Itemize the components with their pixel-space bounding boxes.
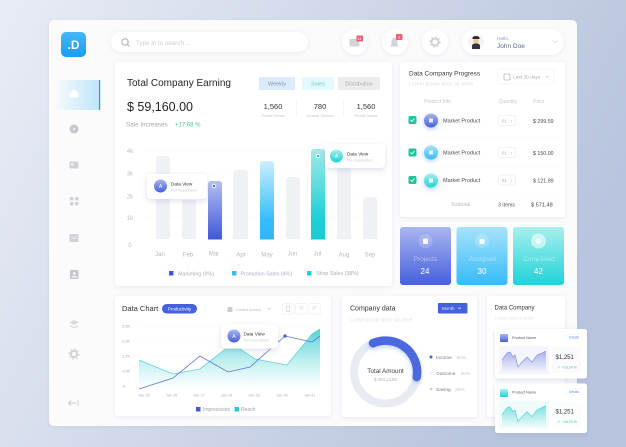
line chart	[122, 324, 320, 398]
badge: productivity	[162, 304, 197, 314]
icon button: bell	[382, 29, 408, 55]
icon button: bell: 3	[398, 34, 401, 40]
product card 1	[495, 329, 587, 378]
subtotal	[451, 202, 553, 208]
line chart: 1,7K	[122, 354, 131, 358]
row 2: Market Product	[443, 150, 481, 156]
bar chart: Apr	[236, 252, 246, 258]
row 1	[408, 114, 554, 128]
icon button: settings	[422, 29, 448, 55]
product card 2: $1,251	[556, 410, 575, 416]
stat card: assigned	[456, 227, 508, 285]
donut chart: $ 204,14.00	[374, 377, 397, 382]
product card 1: +16,24 %	[562, 366, 577, 370]
bar chart legend	[169, 271, 359, 278]
tooltip: March: Data View	[171, 182, 193, 186]
panel: data company progress	[400, 62, 565, 217]
table header	[424, 99, 545, 105]
sale increases: +17,68 %	[175, 122, 201, 128]
panel: data company: Lorem ipsum dolor	[494, 316, 535, 322]
row 1: $ 299.59	[533, 119, 554, 125]
bar chart: 0	[128, 243, 132, 249]
icon button: mail: 11	[358, 36, 363, 41]
user profile: John Doe	[497, 43, 525, 50]
row 1: ↕	[510, 118, 512, 124]
row 2: 01	[502, 150, 507, 156]
product card 2: Product Name	[512, 390, 536, 394]
date dropdown: Last 30 days	[513, 74, 541, 80]
summary stats: 1,560	[264, 102, 282, 111]
row 3: $ 121.89	[533, 178, 554, 184]
donut legend: Income	[436, 355, 452, 361]
user profile: Hello,	[497, 36, 509, 42]
logo	[61, 32, 86, 57]
icon: grid	[70, 197, 78, 206]
row 2	[408, 146, 554, 160]
tooltip: July: A	[335, 154, 339, 160]
stat card: assigned: 30	[478, 267, 487, 276]
stat card: completed	[513, 227, 564, 285]
tooltip: March	[147, 174, 207, 199]
line chart: Jan 30	[276, 394, 288, 398]
summary stats: 780	[314, 102, 326, 111]
product card 2: +16,24 %	[562, 420, 577, 424]
donut chart	[354, 340, 417, 404]
icon: clock	[70, 124, 78, 134]
user profile	[462, 29, 564, 55]
bar chart legend: Marketing (9%)	[178, 272, 214, 278]
panel: total company earning	[115, 62, 392, 286]
icon button: mail	[342, 29, 368, 55]
panel: data company	[487, 296, 565, 417]
summary stats	[261, 100, 378, 118]
bar chart: Jan	[155, 252, 165, 258]
bar chart: 4k	[127, 149, 134, 155]
panel: data chart	[115, 296, 331, 416]
stat card: completed: Completed	[523, 256, 555, 263]
row 2: $ 150.00	[533, 151, 554, 157]
line chart: 1,0K	[122, 368, 131, 374]
line chart: 2,5K	[122, 324, 131, 328]
product card 1: Details	[569, 336, 579, 340]
product card 1: $1,251	[556, 355, 575, 361]
panel: company data: Company data	[350, 306, 396, 312]
stat card: projects: 24	[421, 267, 430, 276]
row 3: Market Product	[443, 178, 481, 184]
heading: Total Company Earning	[127, 78, 231, 89]
summary stats: Profile Views	[261, 113, 285, 118]
icon: layers	[70, 320, 78, 328]
panel: company data	[342, 296, 477, 417]
tabs: Sales	[311, 82, 325, 88]
subtotal: $ 571.48	[531, 202, 553, 208]
row 3	[408, 174, 554, 188]
tooltip: data view: Put Description	[244, 338, 269, 342]
row 2: ↕	[510, 150, 512, 156]
donut legend: 30%	[460, 371, 471, 377]
total value: $ 59,160.00	[127, 100, 193, 114]
tabs: Distribution	[345, 82, 373, 88]
table header: Product Info	[424, 99, 451, 105]
stat card: assigned: Assigned	[469, 256, 496, 263]
bar chart: 2k	[127, 194, 134, 200]
subtotal: Subtotal	[451, 202, 470, 208]
limited access selector	[228, 307, 271, 312]
summary stats: Profile Views	[354, 113, 378, 118]
row 1: Market Product	[443, 118, 481, 124]
stat card: projects	[400, 227, 451, 285]
subtotal: 3 items	[498, 202, 515, 208]
summary stats: Unique Visitors	[307, 113, 333, 118]
icon: mail box	[70, 234, 78, 242]
bar chart legend: Promotion Sales (4%)	[240, 272, 292, 278]
line chart: 0	[123, 384, 126, 388]
icon: contact	[70, 270, 78, 279]
panel: company data: Lorem ipsum dolor sit amet	[350, 318, 413, 324]
product card 1: ↗	[557, 366, 560, 370]
donut legend: Saving	[436, 387, 451, 393]
badge: productivity: Productivity	[168, 307, 192, 312]
tooltip: March: A	[159, 184, 163, 190]
product card 1: Product Name	[512, 336, 536, 340]
bar chart: Jun	[288, 252, 297, 258]
logo: .D	[68, 38, 80, 52]
line chart legend: Impressions	[203, 407, 230, 413]
line chart: Jan 29	[248, 394, 260, 398]
bar chart: Aug	[339, 252, 349, 258]
panel: data company progress: Data Company Progress	[409, 70, 481, 78]
bar chart: May	[261, 252, 273, 258]
donut legend	[430, 355, 471, 393]
sidebar navigation	[53, 80, 100, 406]
limited access selector: Limited Access	[236, 308, 261, 312]
tooltip: data view: A	[232, 334, 236, 340]
table header: Quantity	[498, 99, 518, 105]
stat card: completed: 42	[534, 267, 543, 276]
line chart: Jan 26	[166, 394, 177, 398]
line chart legend	[196, 407, 256, 413]
tooltip: data view: Data View	[244, 332, 265, 336]
panel: data chart: Data Chart	[122, 304, 159, 313]
tooltip: data view	[221, 324, 278, 348]
search bar	[111, 32, 308, 52]
panel: data company: Data Company	[494, 306, 535, 312]
donut legend: 20%	[455, 387, 465, 393]
sparkline	[502, 351, 546, 372]
active nav item: home	[53, 80, 100, 110]
sale increases: Sale Increases	[126, 122, 168, 128]
icon: card	[70, 162, 78, 168]
sparkline	[502, 406, 546, 427]
panel: data company progress: Lorem ipsum dolor sit amet	[409, 82, 473, 88]
icon: settings	[69, 349, 79, 359]
stat card: projects: Projects	[414, 256, 438, 263]
line chart legend: Reach	[241, 407, 256, 413]
icon: logout arrow	[68, 400, 78, 406]
bar chart legend: Shop Sales (38%)	[316, 271, 359, 277]
product card 2: Details	[569, 390, 579, 394]
bar chart: Mar	[209, 252, 219, 258]
summary stats: 1,560	[357, 102, 375, 111]
donut legend: 50%	[456, 355, 467, 361]
line chart: Jan 27	[193, 394, 205, 398]
row 1: 01	[502, 118, 507, 124]
search bar: Type in to search ...	[136, 40, 191, 47]
donut legend: Outcome	[436, 371, 456, 377]
tabs: Weekly	[268, 82, 286, 88]
bar chart	[127, 149, 377, 258]
panel: dashboard window	[49, 20, 577, 426]
bar chart: 3k	[127, 172, 134, 178]
product card 2	[495, 384, 587, 433]
bar chart: Feb	[183, 252, 194, 258]
line chart: Jan 28	[221, 394, 232, 398]
bar chart: Jul	[314, 252, 321, 258]
row 3: 01	[502, 178, 507, 183]
month button: Month	[442, 306, 455, 311]
tooltip: July: Put Description	[347, 158, 373, 162]
tooltip: March: Put Description	[171, 188, 197, 192]
table header: Price	[533, 99, 545, 105]
line chart: Jan 25	[138, 394, 150, 398]
tooltip: July: Data View	[347, 152, 369, 156]
line chart: 2,0K	[122, 338, 131, 344]
tooltip: July	[325, 144, 385, 168]
chart tool buttons	[282, 304, 320, 314]
bar chart: Sep	[365, 252, 376, 258]
donut chart: Total Amount	[367, 368, 404, 375]
product card 2: ↗	[557, 420, 560, 424]
date dropdown	[498, 69, 554, 84]
row 3: ↕	[510, 178, 512, 183]
sale increases	[126, 122, 201, 128]
bar chart: 1k	[127, 216, 134, 222]
line chart: Jan 31	[304, 394, 315, 398]
tabs	[259, 77, 380, 90]
